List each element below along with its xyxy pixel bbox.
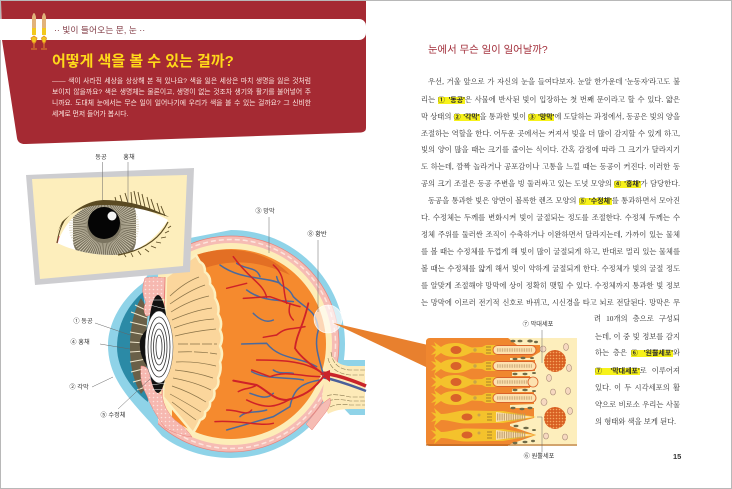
ciliary body — [141, 277, 192, 437]
right heading: 눈에서 무슨 일이 일어날까? — [428, 45, 548, 56]
body text: ⑦ '막대세포'로 이루어져 — [595, 366, 680, 375]
intro text — [52, 77, 311, 118]
body text: 를 알맞게 조절해야 망막에 상이 정확히 맺힐 수 있다. 수정체까지 통과한 빛 정보 — [421, 281, 680, 290]
icon: brushes — [30, 13, 47, 50]
body text: 빛의 양이 많을 때는 크기를 줄이는 식이다. 간혹 감정에 따라 그 크기가 달라지기 — [421, 145, 680, 154]
body text: 조절하는 역할을 한다. 어두운 곳에서는 커져서 빛을 더 많이 감지할 수 있게 하고, — [421, 129, 680, 138]
retina cell panel — [426, 338, 577, 446]
body text: 볼 때는 수정체를 얇게 해서 빛이 약하게 굴절되게 한다. 수정체가 빛의 굴절 정도 — [421, 264, 680, 273]
body text: 다. 수정체는 두께를 변화시켜 빛이 굴절되는 정도를 조절한다. 수정체 두께는 수 — [421, 213, 680, 222]
label: retina: ③ 망막 — [255, 208, 275, 215]
blood vessels — [215, 257, 323, 430]
labels: inset eye: 동공 — [95, 154, 107, 161]
label: lens: ⑤ 수정체 — [101, 412, 125, 419]
body text: 공의 크기 조절은 동공 주변을 빙 둘러싸고 있는 도넛 모양의 ④ '홍채'가 담당한다. — [421, 179, 680, 188]
page number: 15 — [673, 452, 681, 461]
body text: 는 망막에 이르러 전기적 신호로 바뀌고, 시신경을 타고 뇌로 전달된다. 망막은 무 — [421, 298, 680, 307]
macula magnifier — [314, 305, 342, 333]
section band — [0, 19, 366, 40]
vitreous and suspensory fibres — [162, 255, 222, 433]
label: macula: ⑧ 황반 — [307, 231, 327, 238]
intro text: —— 색이 사라진 세상을 상상해 본 적 있나요? 색을 잃은 세상은 마치 생명을 잃은 것처럼 — [52, 78, 311, 85]
section label: ·· 빛이 들어오는 문, 눈 ·· — [54, 25, 145, 35]
body text — [421, 77, 680, 426]
body text: 있다. 이 두 시각세포의 활 — [595, 383, 680, 392]
title: 어떻게 색을 볼 수 있는 걸까? — [52, 53, 234, 70]
intro text: 세계로 먼저 들어가 봅시다. — [52, 111, 128, 118]
intro text: 니까요. 도대체 눈에서는 무슨 일이 일어나기에 우리가 색을 볼 수 있는 걸까요? 그 신비한 — [52, 100, 311, 107]
body text: 하는 층은 ⑥ '원뿔세포'와 — [595, 348, 680, 357]
label: cone cell: ⑥ 원뿔세포 — [524, 453, 554, 460]
cornea — [117, 292, 150, 402]
eyelid and lashes — [57, 200, 169, 233]
label: iris: 홍채 — [123, 154, 135, 161]
eye white — [57, 203, 168, 255]
body text: 약으로 비로소 우리는 사물 — [595, 400, 680, 409]
eye cross-section diagram — [26, 162, 577, 458]
body text: 는데, 이 중 빛 정보를 감지 — [595, 332, 680, 341]
leader lines — [92, 162, 542, 452]
pointer wedge — [333, 323, 428, 368]
body text: 막 상태의 ② '각막'을 통과한 빛이 ③ '망막'에 도달하는 과정에서, 동공은 빛의 양을 — [421, 112, 680, 121]
body text: 리는 ① '동공'은 사물에 반사된 빛이 입장하는 첫 번째 문이라고 할 수 있다. 얇은 — [421, 95, 680, 104]
body text: 를 볼 때는 수정체를 두껍게 해 빛이 많이 굴절되게 하고, 반대로 멀리 있는 물체를 — [421, 247, 680, 256]
intro text: 보이지 않을까요? 색은 생명체는 물론이고, 생명이 없는 것조차 생기와 활기를 불어넣어 주 — [52, 89, 311, 96]
label: rod cell: ⑦ 막대세포 — [523, 321, 553, 328]
pupil — [88, 207, 120, 239]
body text: 우선, 거울 앞으로 가 자신의 눈을 들여다보자. 눈알 한가운데 '눈동자'라고도 불 — [428, 77, 680, 86]
iris — [69, 205, 139, 255]
body text: 도 하는데, 깜짝 놀라거나 공포감이나 고통을 느낄 때는 동공이 커진다. 이러한 동 — [421, 162, 680, 171]
iris — [130, 298, 148, 394]
lens — [145, 295, 173, 393]
body text: 려 10개의 층으로 구성되 — [594, 314, 680, 323]
body text: 동공을 통과한 빛은 양면이 볼록한 렌즈 모양의 ⑤ '수정체'를 통과하면서 모아진 — [428, 196, 680, 205]
inset eye frame — [26, 168, 194, 285]
label: pupil: ① 동공 — [73, 318, 93, 325]
body text: 정체 주위를 둘러싼 조직이 수축하거나 이완하면서 달라지는데, 가까이 있는 물체 — [421, 230, 680, 239]
eyeball layers — [108, 230, 365, 458]
body text: 의 형태와 색을 보게 된다. — [595, 417, 676, 426]
label: iris: ④ 홍채 — [70, 339, 90, 346]
label: cornea: ② 각막 — [69, 384, 89, 391]
optic nerve — [306, 345, 366, 430]
